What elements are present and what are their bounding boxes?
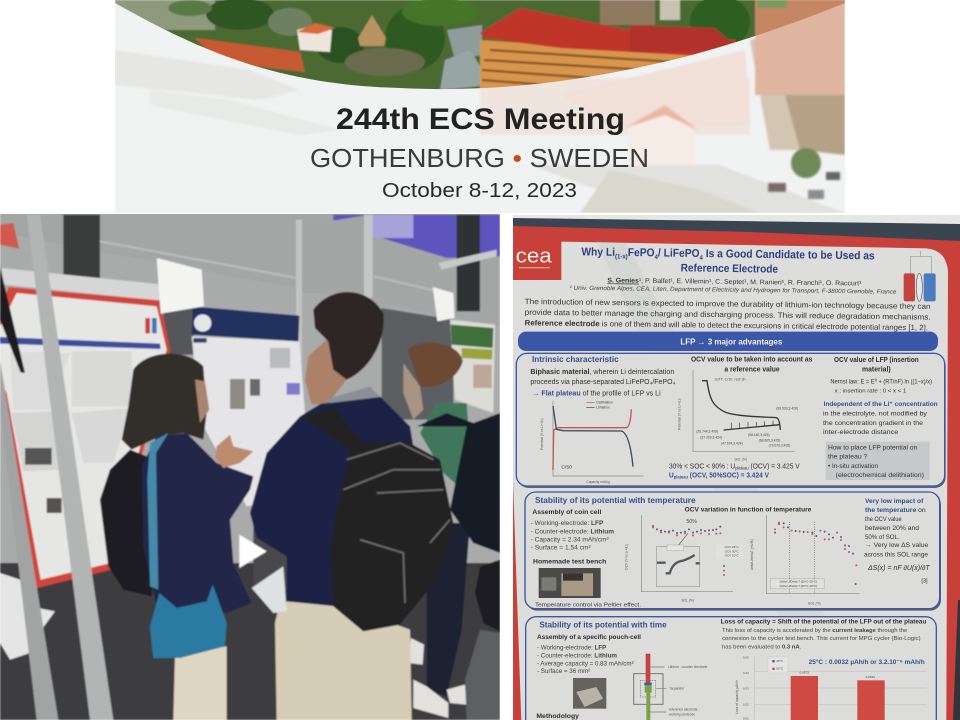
panel heading: Stability of its potential with time	[539, 620, 667, 630]
visitor head	[403, 363, 423, 420]
woman jacket	[142, 433, 253, 613]
poster title: FePO	[628, 247, 655, 259]
visitor trousers	[427, 523, 470, 696]
panel: stability with time	[526, 617, 936, 720]
banner: 244th ECS Meeting	[115, 0, 845, 213]
chart: delta U over delta T: Delta U/Delta T [20°C-10°C]	[780, 584, 817, 588]
poster title: Reference Electrode	[681, 262, 778, 276]
pouch cell text	[536, 634, 641, 720]
chart: GITT OCV: (37.209,3.424)	[700, 436, 722, 440]
poster backdrop	[513, 215, 960, 720]
bar chart: loss of capacity: 0.0373	[800, 671, 809, 675]
column 1 text: Intrinsic characteristic	[532, 354, 619, 364]
chart: potential vs capacity	[540, 401, 644, 484]
temperature impact text: the temperature on	[865, 507, 926, 514]
woman face and hands	[195, 380, 209, 423]
poster authors: S. Genies¹, P. Balfet¹, E. Villemin¹, C. Septet¹, M. Ranieri¹, R. Franchi¹, O. Raccurt¹	[607, 277, 862, 287]
banner dates: October 8-12, 2023	[382, 180, 577, 202]
photo: close-up of scientific poster	[513, 215, 960, 720]
third visitor with green shirt	[403, 343, 500, 720]
poster title: Why Li	[581, 246, 619, 259]
poster title	[581, 246, 875, 276]
column 3 text: x : insertion rate : 0 < x < 1	[835, 389, 906, 395]
blue advantages banner	[518, 332, 938, 351]
panel: intrinsic characteristic	[516, 353, 946, 488]
chart: GITT OCV: (47.674,3.424)	[721, 441, 743, 445]
temperature impact text: across this SOL range	[864, 551, 928, 558]
how to place LFP box: the plateau ?	[828, 453, 868, 460]
plateau values: (OCV) = 3.425 V	[749, 463, 800, 470]
chart: delta U over delta T: deltaU/deltaT (mV/K)	[750, 539, 754, 570]
woman trousers	[173, 646, 227, 720]
bar chart: loss of capacity: 0.04	[743, 671, 749, 675]
column 3 text: inter-electrode distance	[823, 429, 899, 436]
panel heading: Stability of its potential with temperature	[535, 495, 696, 505]
how to place LFP box: How to place LFP potential on	[828, 444, 918, 451]
column 3 text	[823, 357, 938, 436]
column 3 text: OCV value of LFP (insertion	[834, 357, 919, 364]
dark shape at right edge	[475, 560, 500, 631]
column 3 text: Independent of the Li⁺ concentration	[824, 401, 938, 408]
poster title: (1-x)	[615, 253, 628, 261]
chart: potential vs capacity: Lithiation	[596, 405, 610, 409]
bar chart: loss of capacity: 55°C	[776, 667, 784, 671]
visitor backpack	[417, 413, 500, 553]
temperature impact text	[864, 498, 930, 584]
bar chart: loss of capacity: 25°C	[776, 659, 784, 663]
pouch cell text: Methodology	[536, 713, 579, 720]
cea logo: cea	[516, 245, 552, 268]
pouch cell diagram: reference electrode -	[669, 708, 700, 712]
how to place LFP box: (electrochemical delithiation)	[836, 472, 924, 479]
column 3 text: in the electrolyte, not modified by	[823, 411, 928, 418]
woman blue handbag	[150, 585, 227, 658]
chart: delta U over delta T: SOL (%)	[808, 602, 821, 606]
how to place LFP box: • In-situ activation	[828, 463, 878, 470]
chart: GITT OCV: Potential (V vs Li+/Li)	[677, 398, 681, 430]
right poster in photo	[450, 320, 495, 413]
chart: OCV vs SOL with inset: SOL (%)	[681, 599, 694, 603]
chart: GITT OCV: SOL (%)	[734, 458, 747, 462]
chart: potential vs capacity: Delithiation	[596, 401, 613, 405]
current leakage text: connexion to the cycler test bench. This current for MPG cycler (Bio-Logic)	[722, 636, 921, 642]
pouch cell text: - Average capacity = 0.83 mAh/cm²	[537, 661, 634, 667]
bar chart: loss of capacity: 0.05	[743, 655, 749, 659]
loss of capacity heading: Loss of capacity = Shift of the potential of the LFP out of the plateau	[721, 619, 926, 626]
chart: potential vs capacity: Capacity mAh/g	[586, 480, 610, 484]
pouch cell text: - Working-electrode: LFP	[537, 646, 606, 652]
column 1 text: Biphasic material, wherein Li deintercalation	[530, 369, 674, 376]
poster introduction	[525, 297, 931, 332]
column 1 text: → Flat plateau of the profile of LFP vs Li	[532, 391, 661, 398]
exit sign	[0, 223, 19, 249]
chart: potential vs capacity: C/50	[561, 465, 572, 471]
centre poster in photo	[192, 306, 305, 506]
temperature impact text: → Very low ΔS value	[865, 542, 929, 549]
temperature impact text: 50% of SOL.	[865, 534, 900, 541]
plateau values	[669, 463, 800, 480]
man with black backpack	[250, 292, 453, 720]
woman in blue jacket	[100, 354, 253, 720]
chart heading: OCV variation in function of temperature	[685, 507, 812, 514]
woman hair	[122, 354, 207, 450]
chart: GITT OCV: (79.070,3.426)	[769, 443, 790, 447]
bar chart: loss of capacity: 0.02	[743, 703, 749, 707]
bar chart: loss of capacity	[735, 655, 926, 720]
pouch cell photo	[573, 678, 606, 709]
coin cell text: Assembly of coin cell	[532, 509, 601, 516]
poster title: 4	[654, 254, 658, 261]
chart: potential vs capacity: Potential (V vs Li+/Li)	[540, 418, 544, 450]
poster introduction: provide data to better manage the charging and discharging process. This will reduce degradation mechanisms.	[525, 308, 931, 322]
banner faded lower cityscape	[115, 0, 845, 213]
bar chart: loss of capacity: 25°C : 0.0032 µAh/h or 3.2.10⁻⁶ mAh/h	[809, 658, 925, 666]
man black backpack	[302, 408, 453, 631]
man hair	[313, 292, 384, 380]
plateau values: (OCV, 50%SOC) = 3.424 V	[688, 472, 769, 479]
poster diagonal light band	[596, 242, 880, 720]
chart: GITT OCV: (26.744,3.400)	[696, 430, 718, 434]
panel: stability with temperature	[525, 492, 941, 611]
coin cell text: - Surface = 1.54 cm²	[531, 545, 591, 551]
banner colour photo top	[115, 0, 845, 95]
poster title: Is a Good Candidate to be Used as	[703, 248, 875, 262]
plateau values: plateau	[674, 475, 688, 480]
blue advantages banner: LFP → 3 major advantages	[680, 336, 783, 346]
chart: OCV vs SOL with inset: OCV 30°C	[725, 549, 739, 553]
poster introduction: The introduction of new sensors is expected to improve the durability of lithium-ion technology because they can	[525, 297, 931, 311]
current leakage text: This loss of capacity is accelerated by the current leakage through the	[722, 628, 907, 634]
poster title: 4	[699, 255, 703, 262]
visitor shirt	[420, 403, 472, 485]
bar chart: loss of capacity: Loss of capacity µAh/h	[735, 680, 739, 714]
temperature impact text: [3]	[921, 578, 928, 584]
man collar	[325, 386, 380, 403]
column 1 text	[530, 354, 675, 398]
man trousers	[275, 601, 412, 720]
man face	[305, 336, 347, 405]
dropped paper in photo	[0, 573, 55, 660]
poster authors	[570, 277, 897, 296]
column 2 heading: OCV value to be taken into account as	[691, 355, 812, 364]
paper sign in photo	[157, 258, 204, 314]
coin cell text	[531, 509, 614, 565]
plateau values: 30% < SOC < 90% : U	[669, 463, 739, 470]
chart: GITT OCV: (58.140,3.425)	[748, 433, 770, 437]
test bench photo	[539, 568, 601, 598]
photo: visitors discussing posters	[0, 213, 500, 720]
left poster in photo	[0, 268, 170, 588]
how to place LFP box	[826, 442, 930, 480]
Peltier caption: Temperature control via Peltier effect.	[535, 602, 641, 608]
man hand with paper	[252, 566, 287, 613]
banner location: GOTHENBURG • SWEDEN	[310, 143, 649, 173]
temperature impact text: between 20% and	[865, 525, 920, 532]
chart: OCV vs SOL with inset: OCV 10°C	[725, 554, 739, 558]
coin cell text: - Working-electrode: LFP	[531, 521, 603, 527]
pouch cell text: - Counter-electrode: Lithium	[537, 653, 617, 659]
pouch cell text: Assembly of a specific pouch-cell	[537, 634, 641, 641]
coin cell text: Homemade test bench	[533, 558, 606, 565]
chart: OCV vs SOL with inset: OCV (V vs Li+/Li)	[624, 544, 628, 570]
pouch cell diagram: Lithium - counter electrode	[668, 665, 708, 669]
column 3 text: Nernst law: E = E⁰ + (RT/nF) ln ((1−x)/x)	[830, 378, 932, 385]
man pullover	[250, 396, 413, 606]
chart: GITT OCV: GITT, C/10, rest 3h	[715, 378, 746, 382]
poster title: / LiFePO	[658, 247, 700, 260]
chart: GITT OCV	[677, 370, 798, 462]
chart: OCV vs SOL with inset: OCV 25°C	[725, 545, 739, 549]
chart: GITT OCV: (89.533,3.426)	[776, 406, 798, 410]
visitor hair	[407, 343, 463, 387]
video play triangle	[239, 535, 267, 568]
photo background hall	[0, 213, 500, 720]
poster authors: ¹ Univ. Grenoble Alpes, CEA, Liten, Department of Electricity and Hydrogen for Transport, F-38000 Grenoble, France	[570, 286, 897, 296]
coin cell text: - Capacity = 2.34 mAh/cm²	[531, 537, 609, 543]
umbrella in photo	[0, 266, 25, 373]
pouch cell text: - Surface = 36 mm²	[537, 669, 590, 675]
small sign right in photo	[433, 287, 455, 321]
current leakage text	[722, 628, 921, 650]
plateau values: U	[669, 472, 674, 479]
banner heading: 244th ECS Meeting	[336, 103, 625, 136]
plateau values: plateau	[735, 466, 749, 471]
temperature impact text: the OCV value	[865, 516, 902, 523]
chart: delta U over delta T: Delta U/Delta T [20°C-30°C]	[780, 579, 817, 583]
chart: OCV vs SOL with inset	[624, 515, 743, 603]
chart: GITT OCV: (68.605,3.425)	[759, 438, 780, 442]
current leakage text: has been evaluated to 0.3 nA.	[722, 644, 802, 650]
chart: delta U over delta T	[750, 515, 860, 606]
bar chart: loss of capacity: 0.0343	[866, 675, 875, 679]
chart: OCV vs SOL with inset: 50%	[686, 519, 697, 525]
banner heading	[310, 103, 649, 202]
column 2 heading	[691, 355, 812, 374]
column 2 heading: a reference value	[724, 365, 780, 374]
woman bag strap	[147, 433, 168, 590]
poster introduction: Reference electrode is one of them and will able to detect the excursions in critical electrode potential ranges [1, 2].	[525, 318, 928, 332]
visitor shoes	[408, 638, 467, 718]
column 3 text: material)	[862, 366, 891, 373]
temperature impact text: ΔS(x) = nF ∂U(x)/∂T	[867, 565, 930, 572]
bar chart: loss of capacity: 0.03	[743, 686, 749, 690]
pouch cell diagram: Separator	[670, 686, 685, 690]
woman backpack	[100, 450, 157, 596]
metal posts in photo	[0, 215, 113, 720]
coin cell text: - Counter-electrode: Lithium	[531, 529, 614, 535]
poster white panel	[513, 242, 948, 720]
pouch cell diagram	[634, 654, 708, 720]
column 1 text: proceeds via phase-separated LiFePO₄/FePO₄	[530, 379, 675, 386]
pouch cell diagram: working electrode	[669, 712, 695, 716]
column 3 text: the concentration gradient in the	[823, 420, 923, 427]
battery schematic icon	[904, 251, 936, 301]
temperature impact text: Very low impact of	[865, 498, 924, 505]
